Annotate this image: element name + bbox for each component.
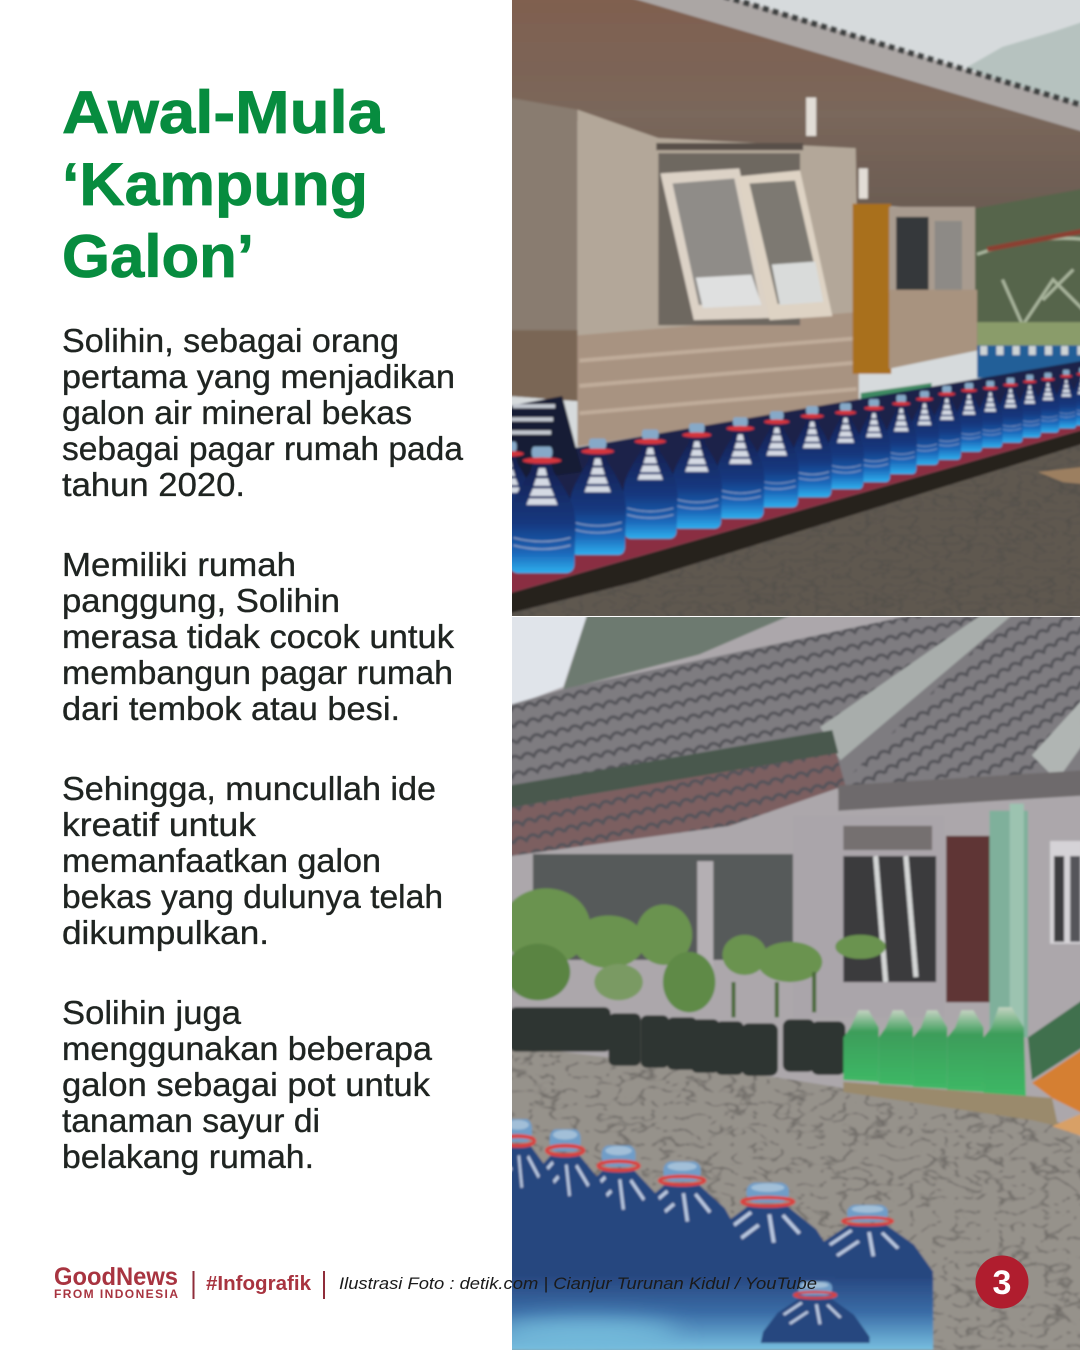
paragraph 4 — [62, 994, 433, 1175]
paragraph 2: panggung, Solihin — [62, 582, 340, 619]
plants — [502, 888, 886, 1017]
paragraph 1: sebagai pagar rumah pada — [62, 430, 464, 467]
paragraph 4: tanaman sayur di — [62, 1102, 320, 1139]
photo credit: Ilustrasi Foto : detik.com | Cianjur Turunan Kidul / YouTube — [339, 1274, 817, 1293]
cobbled ground — [510, 1046, 1080, 1350]
paragraph 2: merasa tidak cocok untuk — [62, 618, 455, 655]
title — [62, 79, 385, 290]
title: ‘Kampung — [62, 151, 368, 218]
page number badge: 3 — [993, 1264, 1011, 1302]
footer logo: GoodNews from Indonesia: GoodNews — [54, 1263, 178, 1291]
paragraph 1: Solihin, sebagai orang — [62, 322, 399, 359]
paragraph 4: menggunakan beberapa — [62, 1030, 433, 1067]
page number badge — [976, 1256, 1028, 1308]
paragraph 4: Solihin juga — [62, 994, 242, 1031]
paragraph 3: Sehingga, muncullah ide — [62, 770, 436, 807]
paragraph 1: pertama yang menjadikan — [62, 358, 455, 395]
paragraph 4: belakang rumah. — [62, 1138, 314, 1175]
paragraph 1 — [62, 322, 464, 503]
paragraph 2 — [62, 546, 455, 727]
black gallons — [510, 1007, 845, 1076]
paragraph 2: dari tembok atau besi. — [62, 690, 400, 727]
green gallons — [843, 1007, 1026, 1096]
hashtag: #Infografik — [206, 1273, 312, 1295]
footer logo: GoodNews from Indonesia: FROM INDONESIA — [54, 1287, 178, 1301]
foreground blue gallons — [472, 1119, 933, 1350]
paragraph 3 — [62, 770, 443, 951]
paragraph 3: kreatif untuk — [62, 806, 257, 843]
paragraph 1: galon air mineral bekas — [62, 394, 412, 431]
paragraph 2: membangun pagar rumah — [62, 654, 453, 691]
paragraph 3: memanfaatkan galon — [62, 842, 381, 879]
paragraph 2: Memiliki rumah — [62, 546, 296, 583]
paragraph 4: galon sebagai pot untuk — [62, 1066, 431, 1103]
paragraph 3: bekas yang dulunya telah — [62, 878, 443, 915]
paragraph 1: tahun 2020. — [62, 466, 245, 503]
photo: house with blue gallon fence — [482, 0, 1080, 620]
title: Galon’ — [62, 223, 254, 290]
cobbled ground — [509, 440, 1080, 620]
photo: house with green and black gallons — [472, 611, 1080, 1350]
title: Awal-Mula — [62, 79, 385, 146]
paragraph 3: dikumpulkan. — [62, 914, 269, 951]
